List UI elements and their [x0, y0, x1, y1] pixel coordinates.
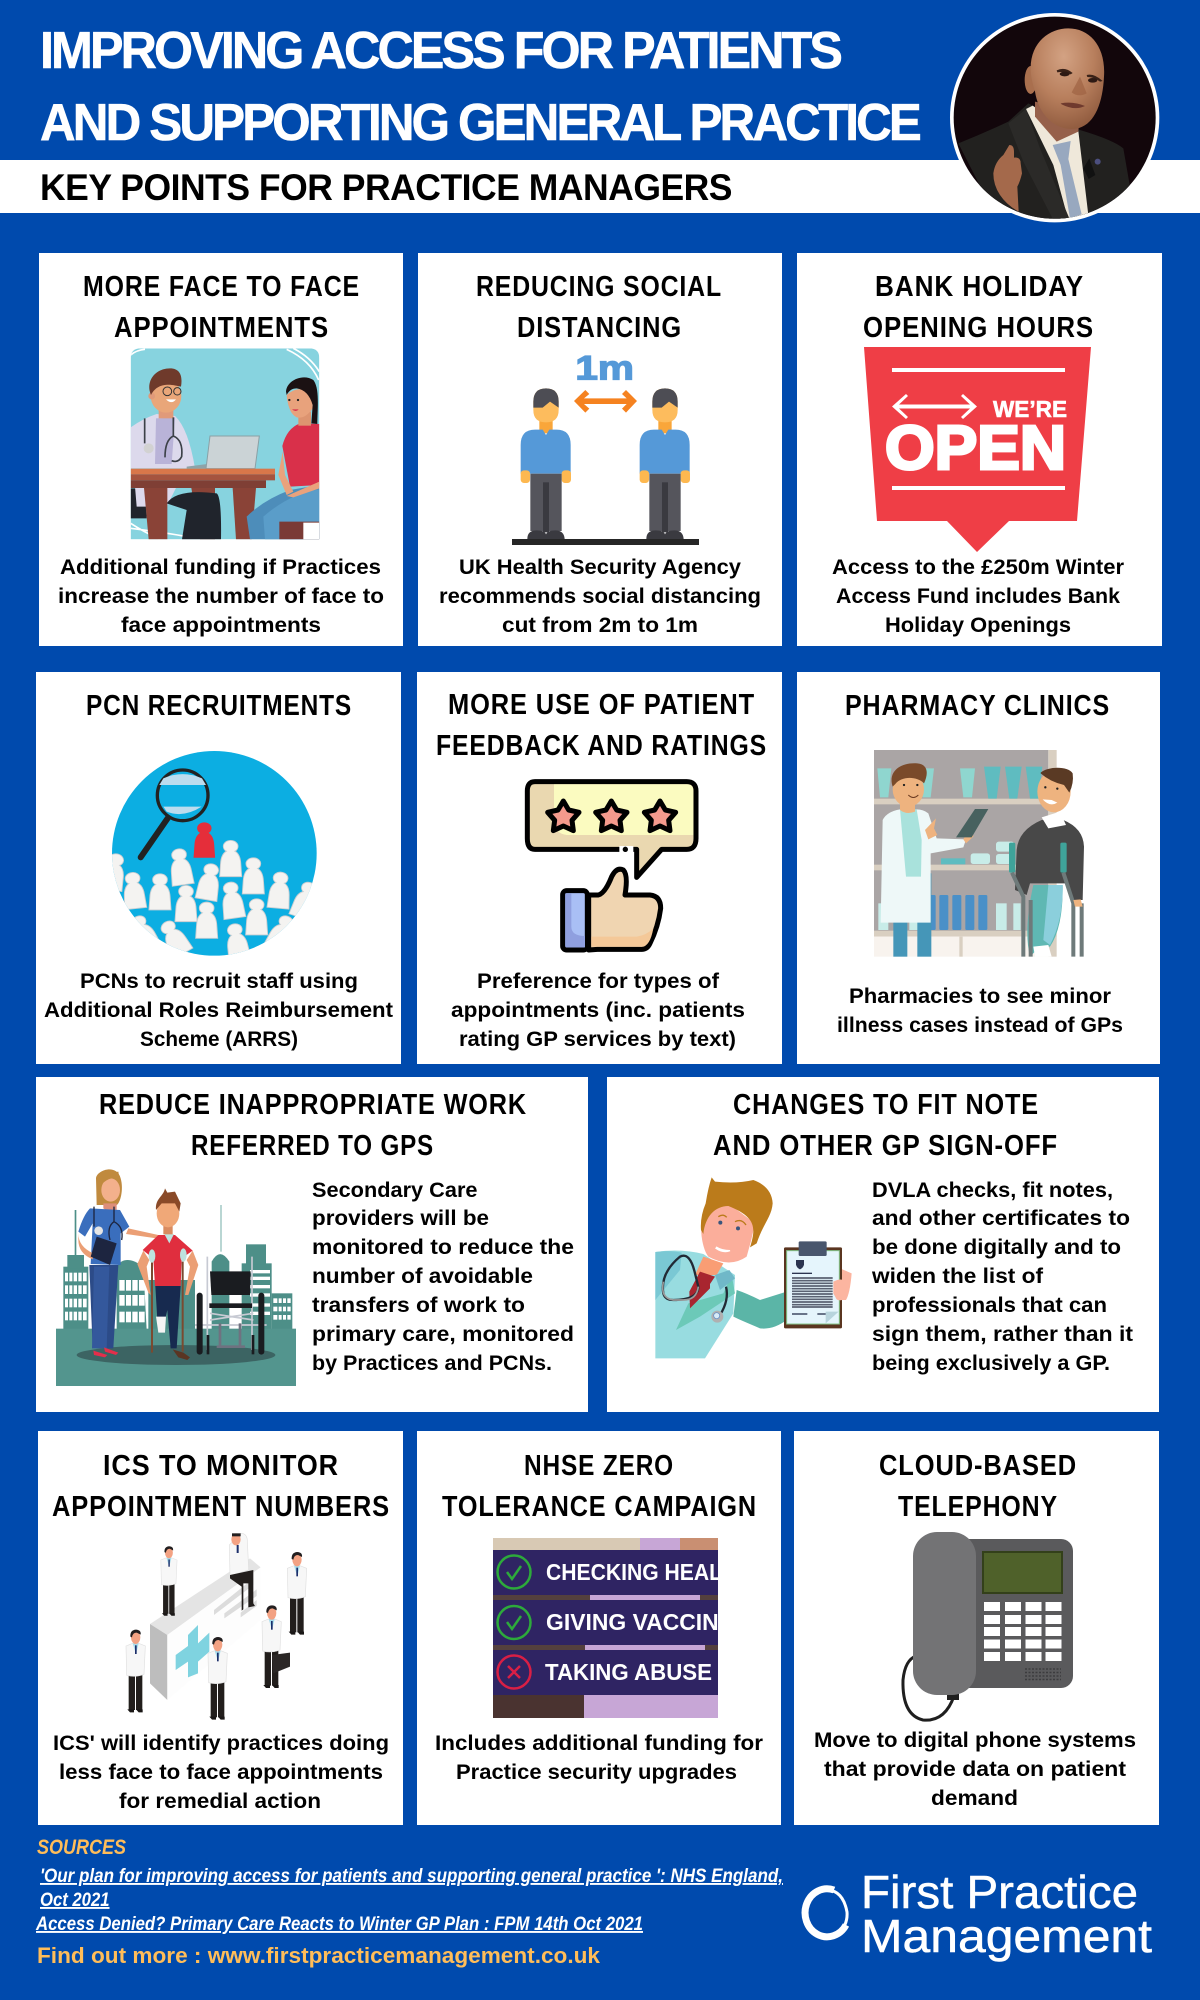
- body text: monitored to reduce the: [312, 1235, 574, 1259]
- body text: Practice security upgrades: [456, 1760, 737, 1784]
- image: campaign banner: GIVING VACCINE: [546, 1609, 734, 1635]
- body text: [832, 555, 1125, 637]
- heading: AND OTHER GP SIGN-OFF: [713, 1130, 1058, 1162]
- body text: [58, 555, 384, 637]
- body text: [435, 1731, 764, 1784]
- logo: First Practice Management: [805, 1866, 1152, 1962]
- body text: [312, 1178, 574, 1375]
- heading: BANK HOLIDAY: [875, 271, 1084, 303]
- body text: for remedial action: [119, 1789, 321, 1813]
- panel: face to face: [39, 253, 403, 646]
- heading: REDUCING SOCIAL: [476, 271, 722, 303]
- header band: [0, 22, 1200, 213]
- panel: pharmacy clinics: [797, 672, 1160, 1064]
- body text: [814, 1728, 1136, 1810]
- body text: [439, 555, 761, 637]
- title: IMPROVING ACCESS FOR PATIENTS: [40, 22, 841, 80]
- heading: REFERRED TO GPS: [191, 1130, 434, 1162]
- body text: [44, 969, 393, 1051]
- body text: appointments (inc. patients: [451, 998, 745, 1022]
- logo: First Practice Management: Management: [861, 1910, 1152, 1962]
- heading: [863, 271, 1094, 344]
- heading: [99, 1089, 527, 1162]
- icon: we're open sign: [864, 347, 1091, 552]
- body text: cut from 2m to 1m: [502, 613, 698, 637]
- body text: UK Health Security Agency: [459, 555, 741, 579]
- heading: FEEDBACK AND RATINGS: [436, 730, 767, 762]
- sources: [35, 1836, 783, 1935]
- panel: PCN recruitments: [36, 672, 401, 1064]
- heading: PHARMACY CLINICS: [845, 690, 1110, 722]
- illustration: magnifier over people: [100, 751, 321, 962]
- body text: Access to the £250m Winter: [832, 555, 1125, 579]
- heading: MORE USE OF PATIENT: [448, 689, 755, 721]
- call to action: Find out more : www.firstpracticemanagement.co.uk: [37, 1943, 601, 1968]
- body text: transfers of work to: [312, 1293, 525, 1317]
- image: campaign banner: TAKING ABUSE: [545, 1659, 712, 1685]
- heading: TELEPHONY: [898, 1491, 1058, 1523]
- heading: [713, 1089, 1058, 1162]
- source links: [35, 1866, 783, 1935]
- heading: [879, 1450, 1077, 1523]
- panel: telephony: [794, 1431, 1159, 1825]
- heading: TOLERANCE CAMPAIGN: [442, 1491, 757, 1523]
- body text: [451, 969, 745, 1051]
- heading: CHANGES TO FIT NOTE: [733, 1089, 1039, 1121]
- heading: OPENING HOURS: [863, 312, 1094, 344]
- body text: less face to face appointments: [59, 1760, 383, 1784]
- title: AND SUPPORTING GENERAL PRACTICE: [40, 94, 920, 152]
- body text: DVLA checks, fit notes,: [872, 1178, 1113, 1202]
- body text: recommends social distancing: [439, 584, 761, 608]
- body text: Holiday Openings: [885, 613, 1071, 637]
- illustration: doctor with clipboard: [655, 1177, 852, 1358]
- portrait photo: [950, 13, 1159, 225]
- heading: APPOINTMENT NUMBERS: [52, 1491, 390, 1523]
- body text: Additional Roles Reimbursement: [44, 998, 393, 1022]
- panel: zero tolerance: [417, 1431, 781, 1825]
- image: campaign banner: [493, 1538, 734, 1718]
- body text: Move to digital phone systems: [814, 1728, 1136, 1752]
- panel: reduce inappropriate work: [36, 1077, 588, 1412]
- label: 1m: 1m: [575, 350, 634, 388]
- illustration: pharmacist and patient: [874, 750, 1084, 957]
- heading: NHSE ZERO: [524, 1450, 674, 1482]
- heading: [476, 271, 722, 344]
- body text: Includes additional funding for: [435, 1731, 764, 1755]
- body text: Additional funding if Practices: [60, 555, 381, 579]
- heading: [52, 1450, 390, 1523]
- body text: increase the number of face to: [58, 584, 384, 608]
- title: [40, 22, 920, 152]
- body text: being exclusively a GP.: [872, 1351, 1110, 1375]
- body text: demand: [931, 1786, 1018, 1810]
- illustration: medics around clinic: [126, 1533, 307, 1720]
- body text: [837, 984, 1123, 1037]
- body text: professionals that can: [872, 1293, 1107, 1317]
- body text: PCNs to recruit staff using: [80, 969, 358, 993]
- heading: REDUCE INAPPROPRIATE WORK: [99, 1089, 527, 1121]
- heading: ICS TO MONITOR: [103, 1450, 339, 1482]
- body text: ICS' will identify practices doing: [53, 1731, 389, 1755]
- body text: sign them, rather than it: [872, 1322, 1133, 1346]
- body text: Preference for types of: [477, 969, 720, 993]
- body text: primary care, monitored: [312, 1322, 574, 1346]
- subtitle: KEY POINTS FOR PRACTICE MANAGERS: [40, 167, 732, 208]
- panel: fit note changes: [607, 1077, 1159, 1412]
- body text: rating GP services by text): [459, 1027, 736, 1051]
- panel: ICS monitoring: [38, 1431, 403, 1825]
- heading: [436, 689, 767, 762]
- source links: Access Denied? Primary Care Reacts to Winter GP Plan : FPM 14th Oct 2021: [35, 1914, 643, 1935]
- body text: and other certificates to: [872, 1206, 1130, 1230]
- illustration: doctor and patient: [131, 348, 319, 539]
- source links: Oct 2021: [40, 1890, 110, 1911]
- heading: [83, 271, 360, 344]
- icon: star rating and thumbs up: [527, 782, 696, 950]
- check icons: [498, 1556, 530, 1688]
- icon: desk phone: [903, 1532, 1073, 1720]
- body text: providers will be: [312, 1206, 489, 1230]
- logo: First Practice Management: First Practice: [861, 1866, 1138, 1918]
- panel: patient feedback: [417, 672, 782, 1064]
- heading: DISTANCING: [517, 312, 682, 344]
- icon: we're open sign: WE’RE: [993, 396, 1067, 422]
- source links: 'Our plan for improving access for patients and supporting general practice ': NHS England,: [40, 1866, 783, 1887]
- heading: MORE FACE TO FACE: [83, 271, 360, 303]
- heading: CLOUD-BASED: [879, 1450, 1077, 1482]
- body text: illness cases instead of GPs: [837, 1013, 1123, 1037]
- icon: we're open sign: OPEN: [885, 414, 1066, 483]
- body text: [53, 1731, 389, 1813]
- icon: logo swirl: [805, 1889, 847, 1937]
- sources: SOURCES: [37, 1836, 126, 1859]
- panel: social distancing: [418, 253, 782, 646]
- body text: by Practices and PCNs.: [312, 1351, 552, 1375]
- body text: [871, 1178, 1133, 1375]
- panel: bank holiday: [797, 253, 1162, 646]
- body text: Access Fund includes Bank: [836, 584, 1120, 608]
- heading: PCN RECRUITMENTS: [86, 690, 352, 722]
- body text: number of avoidable: [312, 1264, 533, 1288]
- illustration: two people 1m apart: [512, 350, 699, 545]
- body text: widen the list of: [871, 1264, 1044, 1288]
- body text: Scheme (ARRS): [140, 1027, 298, 1051]
- body text: Secondary Care: [312, 1178, 478, 1202]
- image: campaign banner: CHECKING HEAL: [546, 1559, 722, 1585]
- body text: that provide data on patient: [824, 1757, 1126, 1781]
- body text: be done digitally and to: [872, 1235, 1121, 1259]
- illustration: nurse, patient on crutches, wheelchair: [56, 1169, 296, 1386]
- heading: APPOINTMENTS: [114, 312, 329, 344]
- body text: face appointments: [121, 613, 321, 637]
- body text: Pharmacies to see minor: [849, 984, 1112, 1008]
- heading: [442, 1450, 757, 1523]
